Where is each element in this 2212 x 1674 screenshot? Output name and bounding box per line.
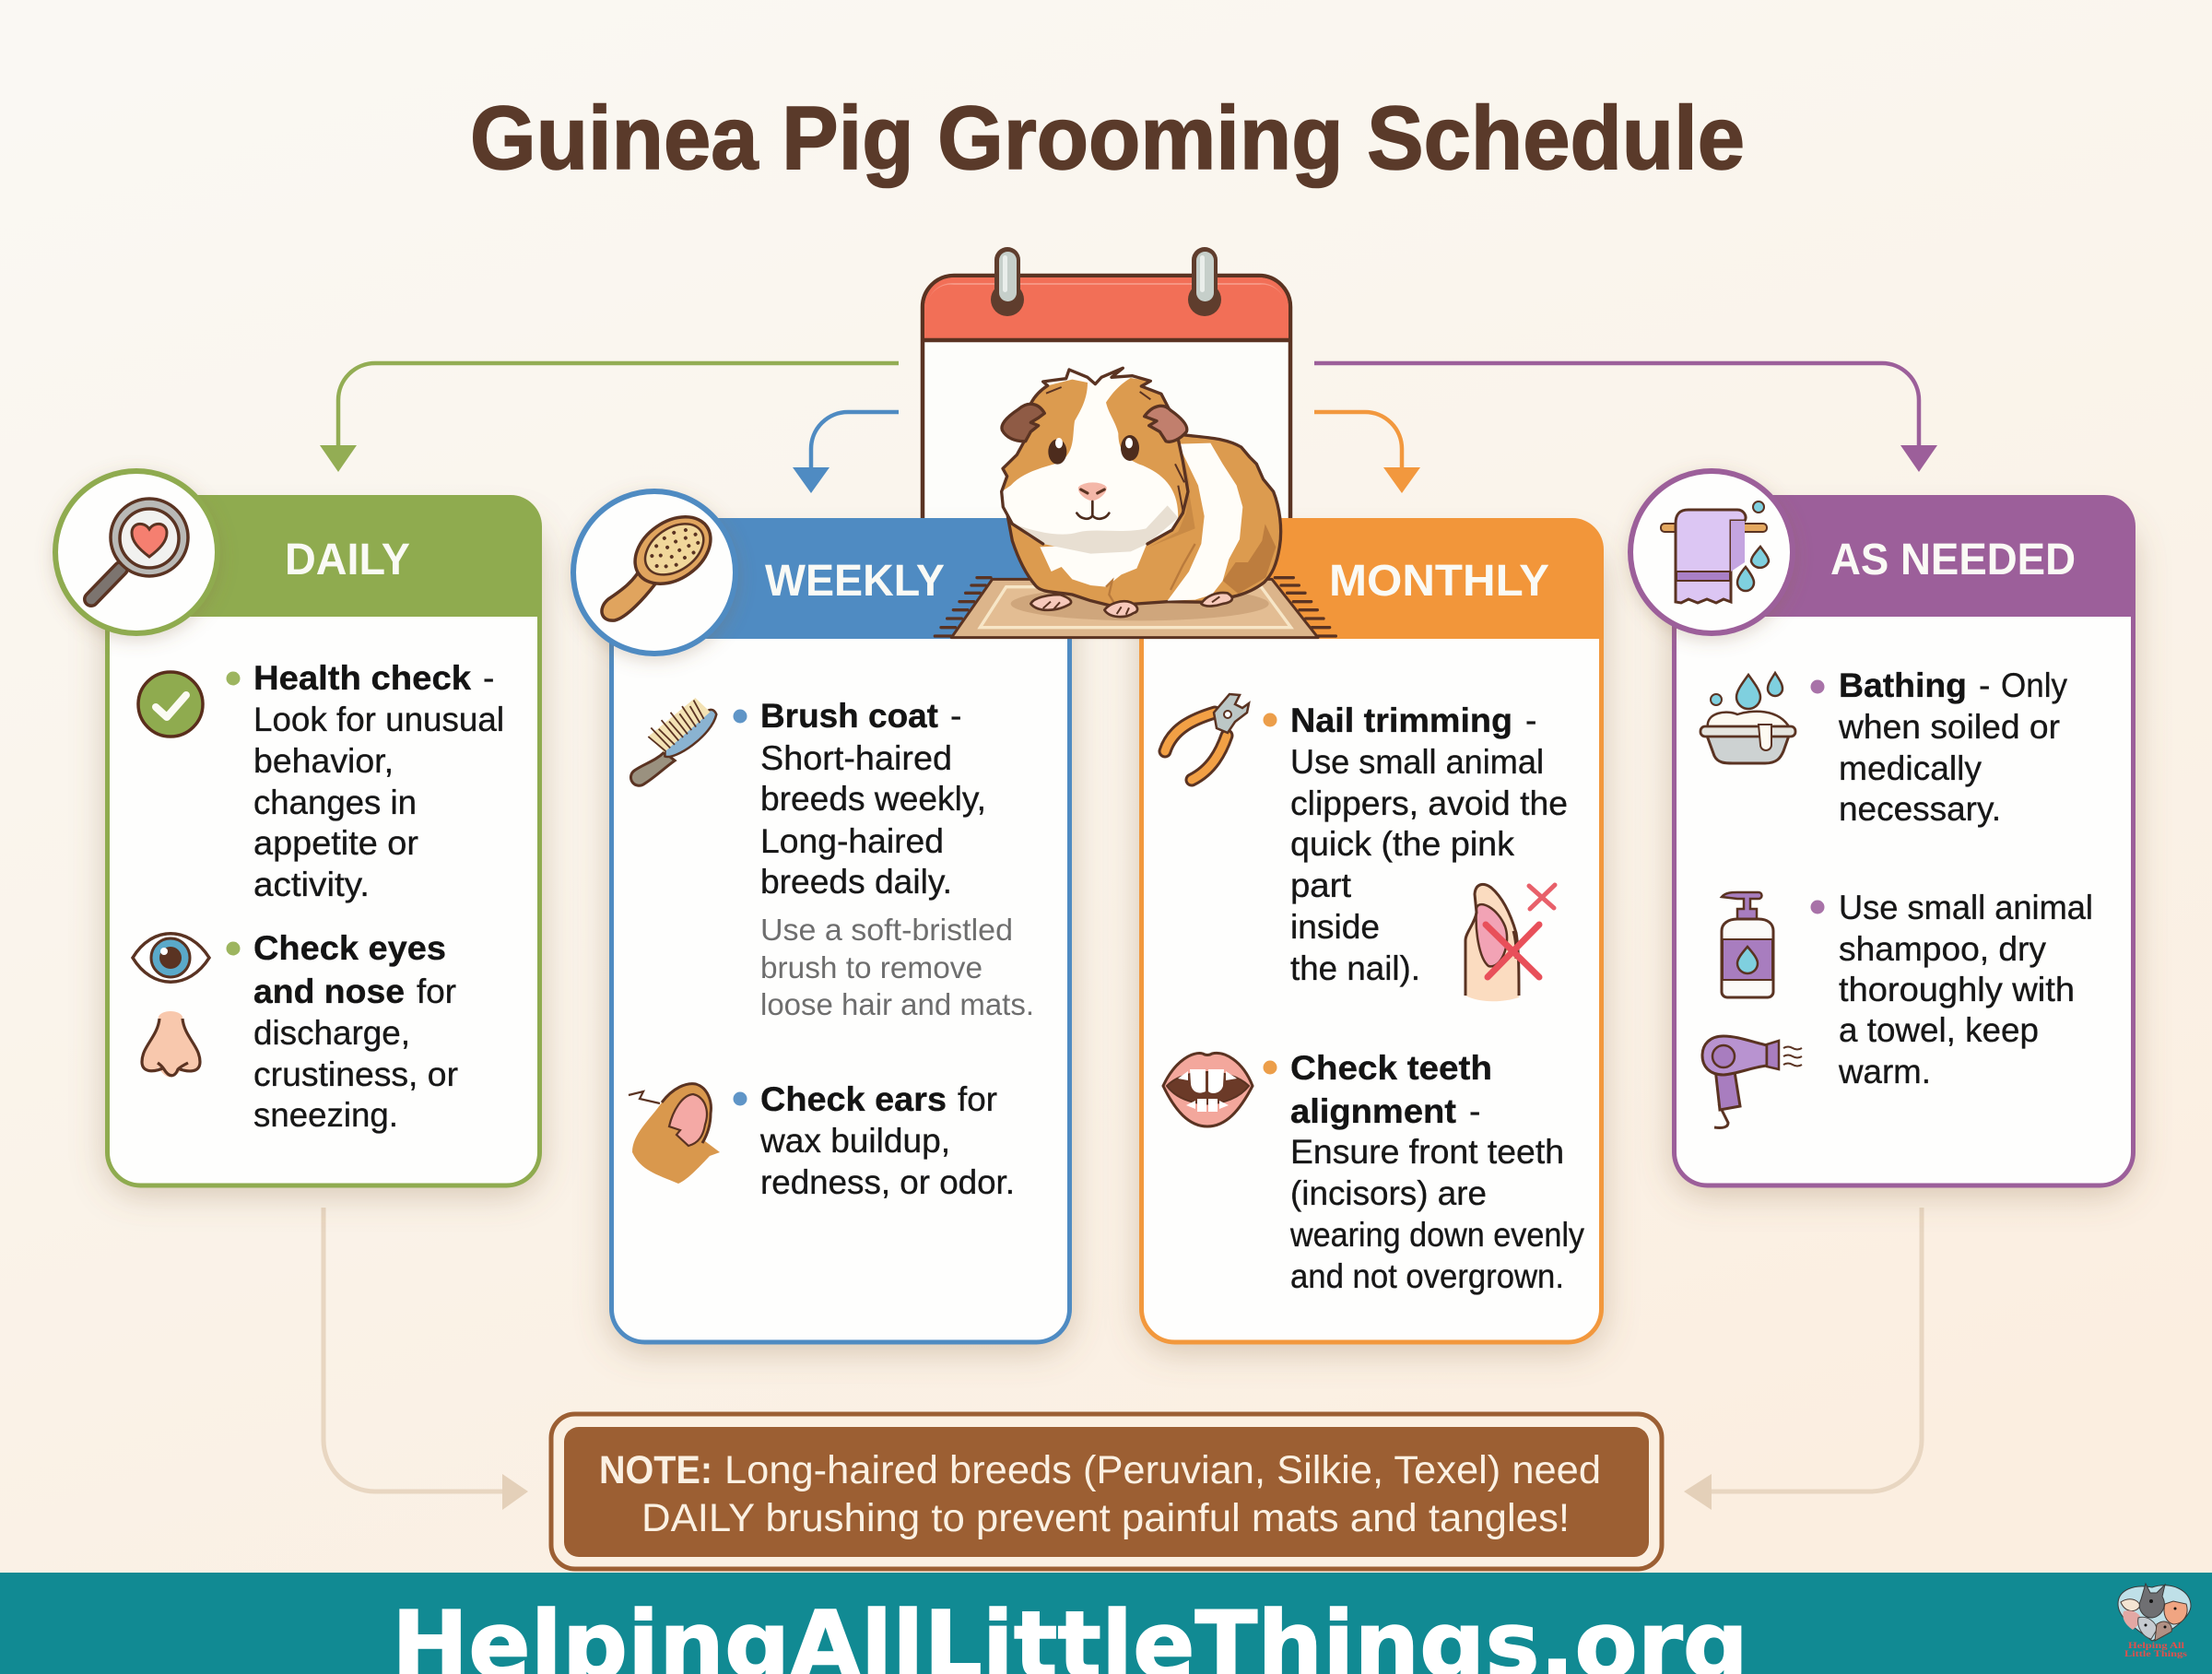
icon: shampoo bottle (1722, 892, 1773, 997)
check eyes and nose text: and nose (253, 973, 405, 1010)
brush coat text: Short-haired (760, 739, 952, 777)
bathing text: necessary. (1839, 790, 2001, 828)
nail trimming text (1263, 701, 1568, 987)
health check text: changes in (253, 784, 417, 821)
check eyes and nose text: discharge, (253, 1014, 410, 1052)
weekly header band (609, 518, 1072, 639)
health check text: activity. (253, 866, 370, 903)
icon: mouth with teeth (1163, 1053, 1253, 1126)
note text: NOTE: (599, 1448, 712, 1492)
brush coat text: Brush coat (760, 697, 938, 735)
brush coat text: brush to remove (760, 950, 982, 984)
check eyes and nose text: crustiness, or (253, 1055, 458, 1093)
nail trimming text: part (1290, 866, 1352, 904)
title: Guinea Pig Grooming Schedule (470, 88, 1745, 188)
calendar (923, 247, 1290, 636)
shampoo and drying text: shampoo, dry (1839, 930, 2046, 968)
icon: guinea pig ear (629, 1084, 720, 1184)
note box (551, 1414, 1662, 1569)
weekly round icon: paddle brush (573, 491, 735, 654)
as needed heading: AS NEEDED (1830, 536, 2076, 584)
arrow: daily to note (324, 1208, 528, 1510)
check ears text: Check ears (760, 1080, 947, 1118)
panel: monthly (1139, 518, 1604, 1342)
check eyes and nose text: Check eyes (253, 929, 446, 967)
nail trimming text: the nail). (1290, 949, 1420, 987)
rug (935, 578, 1335, 638)
check teeth text: wearing down evenly (1289, 1216, 1584, 1254)
check teeth text: Ensure front teeth (1290, 1133, 1564, 1171)
brush coat text: breeds daily. (760, 863, 952, 901)
health check text (227, 659, 504, 903)
monthly header band (1139, 518, 1604, 639)
health check text: Health check (253, 659, 471, 697)
check teeth text: and not overgrown. (1290, 1257, 1564, 1295)
as needed round icon: towel (1630, 471, 1793, 633)
bathing text: Only (2001, 666, 2067, 704)
check teeth text: Check teeth (1290, 1049, 1492, 1087)
icon: nail clippers (1165, 694, 1249, 780)
check eyes and nose text: sneezing. (253, 1096, 398, 1134)
check ears text: wax buildup, (759, 1122, 950, 1160)
note text: Long-haired breeds (Peruvian, Silkie, Texel) need (724, 1448, 1601, 1492)
right eye (1121, 435, 1139, 461)
monthly heading: MONTHLY (1329, 557, 1549, 606)
icon: check mark (138, 672, 203, 737)
health check text: Look for unusual (253, 701, 504, 738)
nail trimming text: Use small animal (1290, 743, 1544, 781)
arrow: calendar to monthly (1314, 412, 1420, 493)
icon: bristle brush (612, 691, 725, 789)
footer logo: Helping All (2128, 1641, 2185, 1650)
check eyes and nose text: for (417, 973, 456, 1010)
paws (1030, 593, 1232, 617)
left ear (1002, 404, 1044, 442)
arrow: calendar to as needed (1314, 363, 1937, 472)
brush coat text: - (950, 697, 961, 735)
shampoo and drying text: Use small animal (1839, 889, 2093, 926)
nose and mouth (1077, 482, 1109, 519)
health check text: behavior, (253, 742, 394, 780)
brush coat text: Long-haired (760, 822, 944, 860)
calendar binder ring right (1188, 247, 1221, 316)
brush coat text: Use a soft-bristled (760, 913, 1013, 947)
arrow: as needed to note (1684, 1208, 1922, 1510)
icon: nose (142, 1011, 200, 1077)
shampoo and drying text: thoroughly with (1839, 971, 2075, 1008)
note text: DAILY brushing to prevent painful mats and tangles! (641, 1496, 1570, 1540)
brush coat text (734, 697, 1034, 1021)
bathing text: Bathing (1839, 666, 1967, 704)
shampoo and drying text: warm. (1838, 1053, 1931, 1090)
health check text: appetite or (253, 824, 418, 862)
head (1002, 368, 1188, 554)
check ears text: redness, or odor. (760, 1163, 1015, 1201)
footer logo (2118, 1584, 2191, 1658)
health check text: - (483, 659, 494, 697)
footer logo: Little Things (2124, 1649, 2188, 1658)
arrow: calendar to weekly (793, 412, 899, 493)
check ears text: for (958, 1080, 997, 1118)
footer band (0, 1573, 2212, 1674)
panel: daily (55, 471, 542, 1185)
nail trimming text: quick (the pink (1290, 825, 1514, 863)
bathing text: when soiled or (1838, 708, 2060, 746)
panel: weekly (573, 491, 1072, 1342)
calendar binder ring left (991, 247, 1024, 316)
nail trimming text: Nail trimming (1290, 701, 1512, 739)
shampoo and drying text (1810, 889, 2093, 1090)
note text (599, 1448, 1601, 1540)
arrow: calendar to daily (320, 363, 899, 472)
as needed header band (1672, 495, 2136, 617)
check eyes and nose text (227, 929, 458, 1134)
check teeth text: alignment (1290, 1092, 1456, 1130)
nail trimming text: clippers, avoid the (1290, 784, 1568, 822)
icon: hair dryer (1702, 1036, 1802, 1127)
icon: eye (133, 934, 209, 982)
nail trimming text: - (1525, 701, 1536, 739)
daily heading: DAILY (285, 536, 410, 584)
check ears text (734, 1080, 1015, 1201)
daily round icon: magnifier with heart (55, 471, 218, 633)
check teeth text: - (1469, 1092, 1480, 1130)
guinea pig on rug (935, 368, 1335, 638)
left eye (1048, 438, 1066, 465)
daily header band (105, 495, 542, 617)
icon: wash basin (1700, 673, 1795, 763)
brush coat text: loose hair and mats. (760, 987, 1034, 1021)
panel: as needed (1630, 471, 2136, 1185)
right ear (1145, 406, 1187, 442)
brush coat text: breeds weekly, (760, 780, 986, 818)
check teeth text (1263, 1049, 1584, 1295)
bathing text (1810, 666, 2067, 828)
icon: nail with red cross (1465, 884, 1555, 1001)
body (1007, 435, 1281, 606)
bathing text: medically (1839, 749, 1982, 787)
nail trimming text: inside (1290, 908, 1380, 946)
check teeth text: (incisors) are (1290, 1174, 1487, 1212)
bathing text: - (1979, 666, 1990, 704)
weekly heading: WEEKLY (765, 557, 945, 606)
shampoo and drying text: a towel, keep (1839, 1011, 2039, 1049)
